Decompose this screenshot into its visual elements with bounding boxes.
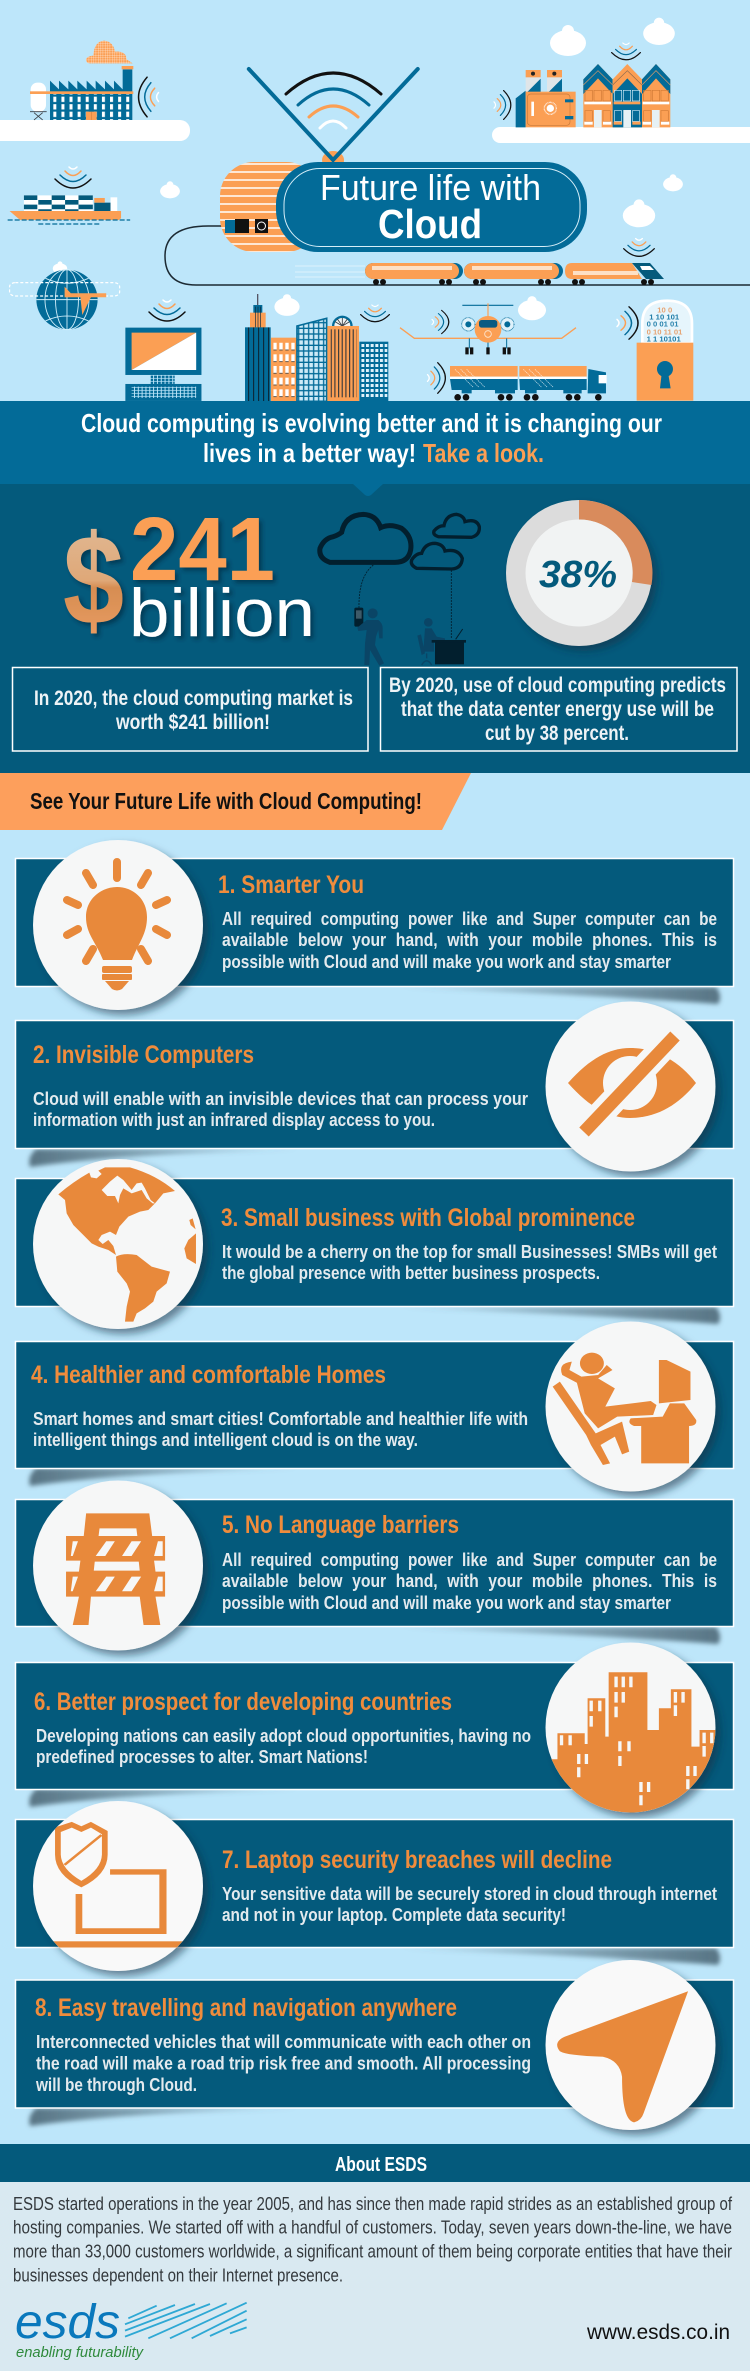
globe and plane [10, 270, 120, 330]
binary digits in lock dome: 0 10 11 01 [647, 327, 683, 336]
panel 7: laptop security [16, 1801, 734, 1971]
intro call to action: Take a look. [423, 438, 544, 468]
footer [0, 2182, 750, 2371]
body 7 [222, 1884, 717, 1925]
panel 3: small business [16, 1159, 734, 1329]
orange cylinder [220, 162, 320, 252]
body 1 [222, 909, 717, 972]
body 3 [222, 1242, 717, 1283]
computer [125, 328, 201, 401]
icon: globe [58, 1167, 196, 1322]
binary digits in lock dome: 1 10 101 [649, 312, 680, 321]
body 6: predefined processes to alter. Smart Nations! [36, 1747, 368, 1767]
body 5: possible with Cloud and will make you work and stay smarter [222, 1593, 671, 1613]
body 3: the global presence with better business prospects. [222, 1263, 600, 1283]
heading 1: 1. Smarter You [218, 871, 364, 899]
heading 2: 2. Invisible Computers [33, 1041, 254, 1069]
body 8: Interconnected vehicles that will communicate with each other on [36, 2032, 531, 2052]
logo: esds [15, 2296, 247, 2361]
heading 6: 6. Better prospect for developing countries [34, 1688, 452, 1716]
stat: 241 billion: billion [129, 575, 315, 651]
about text: businesses dependent on their Internet presence. [13, 2266, 343, 2286]
ship [8, 195, 130, 224]
callout: energy: cut by 38 percent. [485, 722, 629, 745]
title line 2: Cloud [378, 201, 482, 247]
train [295, 263, 664, 285]
icon: crossed eye [568, 1034, 696, 1134]
body 2: Cloud will enable with an invisible devices that can process your [33, 1089, 528, 1109]
callout: market: In 2020, the cloud computing market is [34, 687, 353, 710]
icon: barrier [66, 1513, 165, 1625]
heading 5: 5. No Language barriers [222, 1511, 459, 1539]
cloud platform left [0, 120, 190, 141]
heading 3: 3. Small business with Global prominence [221, 1204, 635, 1232]
section banner: See Your Future Life with Cloud Computing! [30, 788, 422, 814]
body 6: Developing nations can easily adopt cloud opportunities, having no [36, 1726, 531, 1746]
donut chart 38% [506, 500, 652, 646]
body 2: information with just an infrared display access to you. [33, 1110, 435, 1130]
icon: clouds and people [320, 514, 479, 666]
small clouds [53, 18, 683, 320]
capsule body [276, 162, 587, 252]
body 8 [35, 2032, 531, 2095]
stat: 241 billion [63, 500, 315, 652]
heading 7: 7. Laptop security breaches will decline [222, 1846, 612, 1874]
logo: esds: esds [15, 2296, 120, 2349]
binary digits in lock dome: 0 0 01 01 [647, 320, 679, 329]
body 2 [33, 1089, 528, 1130]
body 8: the road will make a road trip risk free and smooth. All processing [36, 2054, 531, 2074]
body 4: Smart homes and smart cities! Comfortable and healthier life with [33, 1409, 528, 1429]
section banner [0, 773, 471, 830]
about text [13, 2194, 733, 2286]
icon: shield and laptop [53, 1822, 191, 1948]
signal arcs [55, 43, 654, 393]
body 8: will be through Cloud. [35, 2075, 197, 2095]
panel 8: easy travelling [16, 1960, 734, 2130]
intro band [0, 401, 750, 484]
panel 4: healthier homes [16, 1322, 734, 1492]
icon: person at desk [553, 1353, 696, 1465]
cloud platform right [492, 127, 750, 143]
houses [583, 64, 670, 127]
about heading band: About ESDS [335, 2154, 427, 2176]
factory [30, 41, 133, 120]
stats panel [0, 484, 750, 773]
safe factory [516, 70, 576, 127]
donut chart 38%: 38% [539, 554, 617, 596]
panel 2: invisible computers [16, 1002, 734, 1172]
icon: city [552, 1672, 716, 1812]
plane [400, 303, 576, 354]
title line 1: Future life with [320, 167, 541, 208]
callout: market [12, 668, 368, 751]
cable [165, 226, 750, 285]
icon: light bulb [67, 862, 167, 990]
wifi arcs [286, 73, 381, 128]
body 4 [33, 1409, 528, 1450]
logo: esds: enabling futurability [16, 2344, 144, 2361]
body 5 [222, 1550, 717, 1613]
callout: market: worth $241 billion! [115, 711, 270, 734]
illustration: header scene [0, 18, 750, 401]
binary digits in lock dome [647, 305, 683, 344]
stat: 241 billion: 241 [130, 500, 275, 600]
binary digits in lock dome: 1 1 10101 [647, 335, 681, 344]
body 4: intelligent things and intelligent cloud is on the way. [33, 1430, 418, 1450]
router antenna V [249, 69, 418, 169]
lock [637, 301, 693, 401]
panel 1: smarter you [16, 840, 734, 1010]
body 7: and not in your laptop. Complete data security! [222, 1905, 566, 1925]
website url: www.esds.co.in [586, 2321, 730, 2344]
icon: navigation arrow [557, 1991, 688, 2122]
intro text line 2: lives in a better way! [203, 438, 416, 468]
callout: energy [380, 668, 737, 751]
stat: 241 billion: $ [63, 509, 124, 652]
plug [225, 219, 268, 233]
about heading band [0, 2144, 750, 2182]
heading 4: 4. Healthier and comfortable Homes [31, 1361, 386, 1389]
truck [450, 366, 607, 401]
body 1: possible with Cloud and will make you work and stay smarter [222, 952, 671, 972]
panel 6: developing countries [16, 1642, 734, 1820]
title capsule [220, 162, 587, 252]
body 6 [36, 1726, 531, 1767]
heading 8: 8. Easy travelling and navigation anywhere [35, 1994, 457, 2022]
panel 5: no language barriers [16, 1480, 734, 1650]
binary digits in lock dome: 10 0 [657, 305, 672, 314]
city skyline [245, 294, 388, 401]
